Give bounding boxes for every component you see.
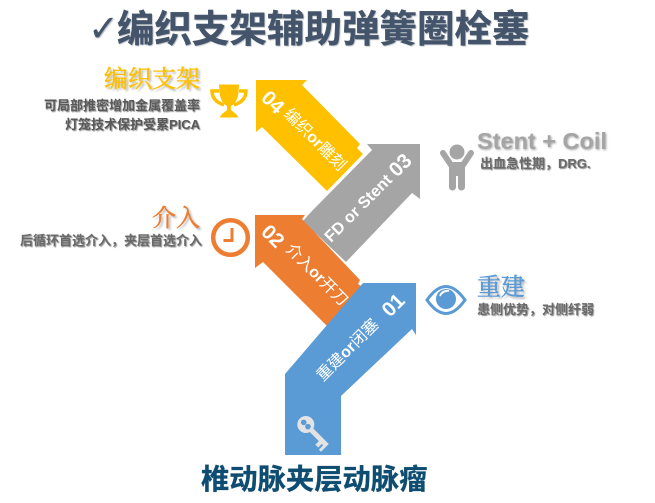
arrow 03: grey: 03 bbox=[384, 149, 417, 182]
arrow 03: grey: FD or Stent bbox=[321, 171, 396, 246]
text: braided stent notes bbox=[44, 98, 201, 132]
arrow 02: orange: 02 bbox=[256, 220, 289, 253]
icon: clock bbox=[213, 220, 248, 255]
text: stent + coil notes: 出血急性期，DRG. bbox=[480, 156, 591, 171]
heading: reconstruction: 重建 bbox=[477, 275, 525, 301]
arrow 01: blue: 重建or闭塞 bbox=[313, 316, 382, 385]
arrow 02: orange bbox=[255, 215, 368, 327]
icon: eye bbox=[427, 286, 465, 314]
title: ✓ bbox=[88, 7, 119, 50]
arrow 04: yellow bbox=[256, 80, 363, 191]
bottom label: vertebral artery dissection: 椎动脉夹层动脉瘤 bbox=[201, 463, 427, 495]
heading: intervention: 介入 bbox=[152, 206, 200, 232]
title: 编织支架辅助弹簧圈栓塞 bbox=[117, 8, 530, 50]
heading: stent + coil: Stent + Coil bbox=[477, 128, 607, 154]
icon: standing person bbox=[443, 144, 471, 190]
arrow 04: yellow: 编织or雕刻 bbox=[280, 105, 349, 174]
text: braided stent notes: 可局部推密增加金属覆盖率 bbox=[44, 98, 200, 113]
arrow 01: blue bbox=[285, 283, 416, 455]
text: intervention notes: 后循环首选介入，夹层首选介入 bbox=[20, 233, 202, 248]
arrow 04: yellow: 04 bbox=[256, 86, 289, 119]
heading: braided stent: 编织支架 bbox=[104, 67, 200, 93]
text: braided stent notes: 灯笼技术保护受累PICA bbox=[65, 117, 200, 132]
arrow 03: grey bbox=[303, 144, 420, 262]
arrow 01: blue: 01 bbox=[377, 289, 410, 322]
text: reconstruction notes: 患侧优势，对侧纤弱 bbox=[477, 302, 594, 317]
arrow 02: orange: 介入or开刀 bbox=[282, 240, 351, 309]
icon: trophy bbox=[212, 84, 246, 118]
icon: key bbox=[294, 413, 333, 452]
